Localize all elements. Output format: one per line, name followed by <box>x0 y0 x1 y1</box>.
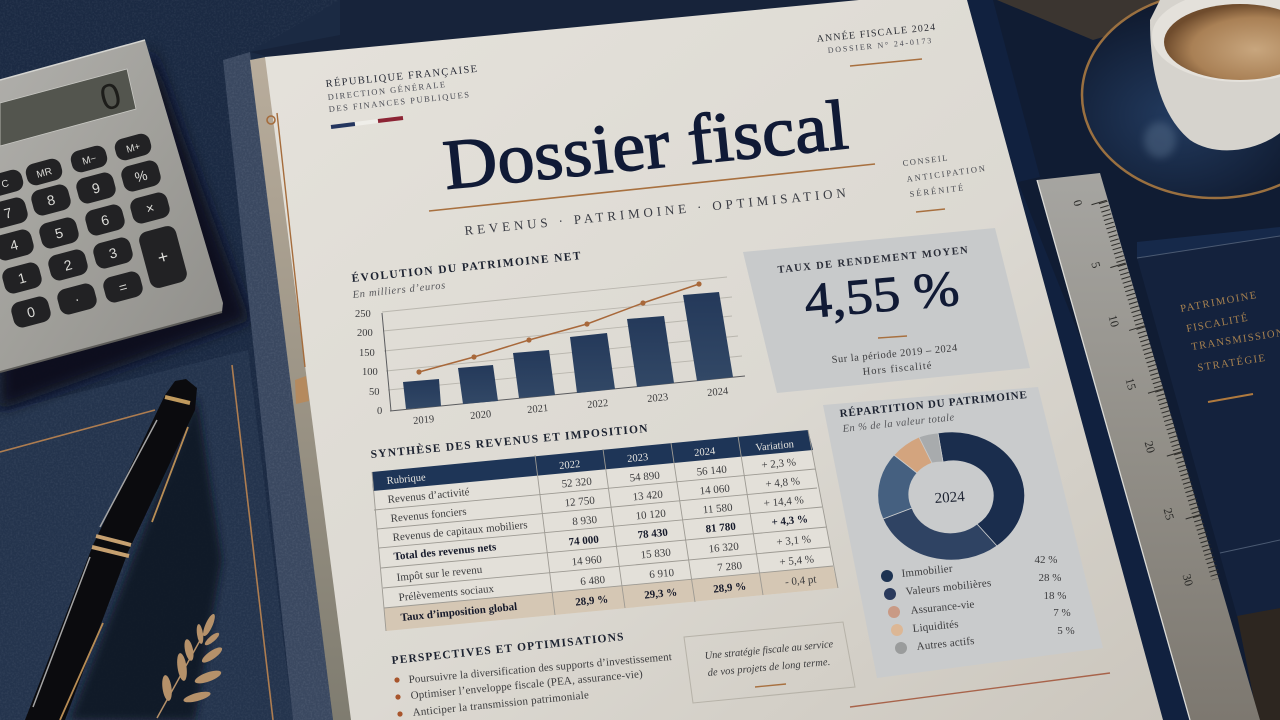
table header text: 2024 <box>694 446 716 459</box>
y axis labels: 50 <box>369 387 380 398</box>
table column variation: + 3,1 % <box>776 533 812 549</box>
calculator keys: 1 <box>16 269 28 287</box>
breakdown legend: 7 % <box>1053 607 1071 619</box>
x axis labels: 2021 <box>527 403 549 416</box>
right dark folder surface <box>967 0 1280 720</box>
table column 2024: 11 580 <box>702 502 734 516</box>
booklet text list <box>1180 290 1280 374</box>
callout: Une stratégie fiscale au service <box>704 639 834 662</box>
x axis labels: 2019 <box>413 414 435 427</box>
table column variation <box>761 456 817 588</box>
folder spine <box>223 52 333 720</box>
calculator keys: × <box>144 199 156 217</box>
booklet text list: FISCALITÉ <box>1185 312 1249 335</box>
breakdown legend: 18 % <box>1044 590 1066 602</box>
calculator keys: M− <box>81 153 98 168</box>
outlook bullets: Poursuivre la diversification des supports d’investissement <box>408 651 672 686</box>
table header text: Variation <box>755 439 795 454</box>
ruler numbers: 5 <box>1088 260 1103 270</box>
y axis labels: 200 <box>357 328 373 339</box>
x axis labels <box>413 386 729 427</box>
ruler numbers: 30 <box>1180 572 1196 588</box>
page footer rule <box>850 673 1110 707</box>
calculator keys: = <box>117 278 129 296</box>
table column 2022: 12 750 <box>564 495 596 509</box>
calculator <box>0 40 223 372</box>
table column 2024: 14 060 <box>699 483 731 497</box>
leather grain texture <box>0 0 340 720</box>
chart heading: ÉVOLUTION DU PATRIMOINE NET <box>351 248 581 285</box>
breakdown legend: Immobilier <box>901 563 953 580</box>
stone table top corner <box>997 0 1160 40</box>
notebook details <box>0 365 273 720</box>
title rule <box>429 164 875 211</box>
table column 2024: 56 140 <box>696 464 728 478</box>
callout <box>684 622 855 703</box>
calculator keys: 7 <box>2 204 14 222</box>
issuer block: RÉPUBLIQUE FRANÇAISE <box>325 63 478 90</box>
table column variation: + 14,4 % <box>763 494 804 510</box>
fiscal year block: DOSSIER N° 24-0173 <box>827 36 932 55</box>
issuer block: DES FINANCES PUBLIQUES <box>328 89 470 114</box>
trend line <box>416 281 702 375</box>
table header band <box>372 430 813 491</box>
side note <box>902 153 986 212</box>
calculator keys: 9 <box>90 179 102 197</box>
breakdown legend: Valeurs mobilières <box>905 577 992 598</box>
table column 2023: 15 830 <box>640 547 672 561</box>
breakdown legend: 5 % <box>1057 625 1075 637</box>
tan under-sheet <box>250 57 352 720</box>
ruler numbers: 25 <box>1161 506 1177 522</box>
calculator keys: 6 <box>99 211 111 229</box>
calculator keys: 4 <box>8 236 20 254</box>
x axis labels: 2020 <box>470 409 492 422</box>
table row labels: Total des revenus nets <box>393 541 498 563</box>
breakdown legend: Autres actifs <box>916 635 975 653</box>
table column 2022: 14 960 <box>571 554 603 568</box>
panel: average yield <box>743 228 1030 393</box>
donut centre label: 2024 <box>934 489 966 507</box>
yield note: Sur la période 2019 – 2024 <box>831 343 958 366</box>
table row labels: Prélèvements sociaux <box>398 583 495 604</box>
table row labels <box>387 486 528 624</box>
title: Dossier fiscal <box>440 86 852 205</box>
coffee <box>1164 4 1280 80</box>
table column 2022 <box>561 476 609 609</box>
ruler ticks <box>1099 202 1216 579</box>
subtitle: REVENUS · PATRIMOINE · OPTIMISATION <box>464 185 847 238</box>
breakdown legend: Assurance-vie <box>910 598 975 617</box>
table row labels: Revenus d’activité <box>387 486 470 506</box>
table column variation: + 5,4 % <box>779 553 815 569</box>
ruler numbers: 0 <box>1070 198 1085 208</box>
table row labels: Taux d’imposition global <box>400 601 518 624</box>
calculator shadow <box>0 45 250 410</box>
side note: CONSEIL <box>902 153 948 168</box>
calculator keys: 2 <box>62 256 74 274</box>
booklet text list: STRATÉGIE <box>1197 352 1266 374</box>
yield rule <box>878 336 907 338</box>
table column 2024: 81 780 <box>705 521 737 535</box>
calculator keys: 3 <box>107 244 119 262</box>
panel: average yield: Hors fiscalité <box>862 360 932 378</box>
breakdown legend: Liquidités <box>912 618 959 635</box>
table column 2024: 28,9 % <box>713 580 747 596</box>
callout: de vos projets de long terme. <box>707 657 831 679</box>
panel: wealth breakdown <box>823 387 1103 678</box>
outlook bullets <box>394 651 672 719</box>
breakdown legend <box>881 554 1075 654</box>
y axis labels: 250 <box>355 309 371 320</box>
table column 2023: 54 890 <box>629 470 661 484</box>
y axis labels <box>355 309 382 417</box>
table column 2024: 7 280 <box>717 560 743 574</box>
breakdown subtitle: En % de la valeur totale <box>841 412 955 435</box>
right booklet <box>1137 227 1280 616</box>
table column variation: + 4,8 % <box>765 475 801 491</box>
table header text: 2023 <box>627 452 649 465</box>
table column 2022: 8 930 <box>572 514 598 528</box>
table column 2022: 74 000 <box>568 534 600 548</box>
table column 2024 <box>696 464 747 596</box>
calculator keys: MR <box>35 166 53 181</box>
side note: ANTICIPATION <box>906 163 986 184</box>
icon: French flag bar <box>331 118 403 127</box>
table column 2023: 13 420 <box>632 489 664 503</box>
table column 2024: 16 320 <box>708 541 740 555</box>
table row labels: Impôt sur le revenu <box>396 564 483 584</box>
ruler numbers: 10 <box>1106 313 1122 329</box>
table header text <box>386 439 795 487</box>
spine grain texture <box>224 54 332 720</box>
chart subtitle: En milliers d’euros <box>351 280 446 301</box>
coffee saucer <box>1082 0 1280 198</box>
calculator keys: 8 <box>45 191 57 209</box>
ruler numbers: 15 <box>1123 376 1139 392</box>
calculator display: 0 <box>95 74 125 119</box>
calculator keys: 5 <box>53 224 65 242</box>
pen <box>25 379 197 720</box>
yield value: 4,55 % <box>802 260 961 329</box>
ruler numbers <box>1070 198 1196 588</box>
table column variation: + 4,3 % <box>771 513 808 529</box>
yield heading: TAUX DE RENDEMENT MOYEN <box>777 245 969 276</box>
calculator keys: C <box>0 178 10 191</box>
y axis labels: 100 <box>362 367 378 378</box>
breakdown legend: 28 % <box>1039 572 1061 584</box>
navy folder strip beside paper <box>967 0 1190 720</box>
table column 2023: 10 120 <box>635 508 667 522</box>
chart gridlines and axes <box>382 277 745 411</box>
x axis labels: 2022 <box>587 398 609 411</box>
breakdown heading: RÉPARTITION DU PATRIMOINE <box>839 389 1027 420</box>
binding string <box>267 113 309 404</box>
table row labels: Revenus fonciers <box>390 506 467 525</box>
outlook heading: PERSPECTIVES ET OPTIMISATIONS <box>391 631 624 667</box>
notebook cover base <box>0 350 293 720</box>
bars <box>403 292 733 409</box>
table header text: 2022 <box>559 459 581 472</box>
table column 2023: 29,3 % <box>644 586 678 602</box>
table column 2022: 6 480 <box>580 574 606 588</box>
donut chart <box>878 432 1025 560</box>
x axis labels: 2023 <box>647 392 669 405</box>
ruler <box>1037 173 1260 720</box>
table column 2023: 78 430 <box>637 527 669 541</box>
table column 2022: 28,9 % <box>575 593 609 609</box>
stone table bottom corner <box>1237 608 1280 720</box>
table row labels: Revenus de capitaux mobiliers <box>392 519 528 544</box>
table column 2023 <box>629 470 678 602</box>
outlook bullets: Optimiser l’enveloppe fiscale (PEA, assurance-vie) <box>410 668 644 702</box>
fiscal year block <box>816 21 936 66</box>
calculator keys: % <box>133 167 149 185</box>
notebook gold border <box>0 365 273 720</box>
issuer block <box>325 63 478 127</box>
fiscal year block: ANNÉE FISCALE 2024 <box>816 21 936 45</box>
table column variation: - 0,4 pt <box>784 574 817 588</box>
table column 2022: 52 320 <box>561 476 593 490</box>
coffee cup <box>1150 0 1280 150</box>
side note: SÉRÉNITÉ <box>909 182 964 199</box>
table column 2023: 6 910 <box>649 567 675 581</box>
panel: outlook <box>391 631 672 719</box>
breakdown legend: 42 % <box>1035 554 1057 566</box>
calculator display <box>0 69 136 146</box>
paper page <box>265 0 1163 720</box>
x axis labels: 2024 <box>707 386 729 399</box>
outlook bullets: Anticiper la transmission patrimoniale <box>412 689 590 719</box>
y axis labels: 150 <box>359 348 375 359</box>
calculator keys <box>0 132 189 329</box>
booklet rule <box>1208 394 1253 402</box>
table header text: Rubrique <box>386 472 427 487</box>
folder back panel <box>250 0 880 70</box>
calculator keys: + <box>155 246 171 268</box>
table column variation: + 2,3 % <box>761 456 797 472</box>
booklet text list: PATRIMOINE <box>1180 290 1257 315</box>
ruler numbers: 20 <box>1142 439 1158 455</box>
y axis labels: 0 <box>377 406 382 417</box>
table body background <box>372 430 838 631</box>
calculator keys: · <box>73 291 81 307</box>
table heading: SYNTHÈSE DES REVENUS ET IMPOSITION <box>370 421 649 461</box>
table grid <box>372 430 838 631</box>
panel: income table <box>370 421 838 631</box>
issuer block: DIRECTION GÉNÉRALE <box>327 79 446 102</box>
icon: laurel branch <box>157 613 224 718</box>
total row background <box>384 566 838 631</box>
panel: net wealth chart <box>351 248 745 427</box>
pen shadow <box>70 395 222 720</box>
calculator keys: M+ <box>125 141 142 156</box>
calculator keys: 0 <box>25 303 37 321</box>
